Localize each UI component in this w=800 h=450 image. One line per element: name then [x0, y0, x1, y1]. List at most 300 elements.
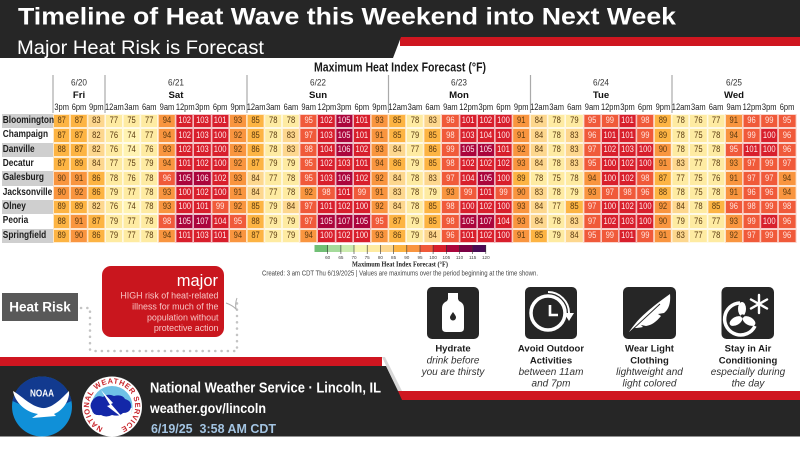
row: Peoria: Peoria: [3, 215, 28, 226]
hour labels: 9am: [726, 101, 741, 112]
row: Springfield: 99: [641, 230, 649, 241]
hour labels: 12pm: [459, 101, 478, 112]
row: Danville: 93: [375, 144, 384, 155]
row: Jacksonville: [2, 186, 796, 200]
row: Champaign: 101: [621, 130, 634, 141]
day headers: 6/23: [451, 78, 467, 88]
icon: feather: [623, 287, 676, 339]
row: Springfield: 86: [393, 230, 401, 241]
row: Bloomington: 95: [304, 115, 313, 126]
row: Decatur: 95: [304, 158, 313, 169]
row: Champaign: 100: [214, 130, 226, 141]
row: Champaign: 92: [234, 130, 242, 141]
hour labels: 3pm: [337, 101, 351, 112]
legend: heat index colour scale: 60: [325, 255, 331, 260]
row: Springfield: 92: [730, 230, 738, 241]
row: Springfield: 83: [676, 230, 685, 241]
row: Decatur: 93: [730, 158, 738, 169]
row: Peoria: [3, 214, 796, 229]
row: Springfield: 95: [588, 230, 596, 241]
icon: clock: [525, 287, 577, 339]
row: Danville: 100: [639, 144, 652, 155]
row: Danville: 84: [393, 144, 401, 155]
row: Olney: 100: [639, 201, 652, 212]
row: Bloomington: 77: [145, 115, 154, 126]
hour labels: 3am: [691, 101, 706, 112]
logo: NOAA: NOAA: [30, 388, 54, 400]
tip: stay in air conditioning: [711, 344, 786, 390]
icon: hydrate bottle: [427, 287, 479, 339]
row: Champaign: 102: [178, 130, 191, 141]
row: Bloomington: 95: [588, 115, 596, 126]
row: Galesburg: 84: [251, 173, 260, 184]
row: Peoria: 103: [621, 216, 634, 227]
row: Jacksonville: 93: [588, 187, 596, 198]
row: Galesburg: 76: [127, 173, 136, 184]
legend: heat index colour scale: 85: [391, 255, 397, 260]
row: Galesburg: 77: [676, 173, 685, 184]
row: Decatur: 100: [603, 158, 616, 169]
hour labels: 3pm: [195, 101, 210, 112]
row: Springfield: 97: [747, 230, 756, 241]
row: Danville: 95: [730, 144, 738, 155]
row: Galesburg: 78: [287, 173, 295, 184]
row: Galesburg: 94: [588, 173, 596, 184]
row: Champaign: 96: [588, 130, 596, 141]
row: Springfield: 100: [497, 230, 510, 241]
row: Danville: Danville: [3, 144, 35, 154]
row: Champaign: 87: [75, 130, 83, 141]
row: Champaign: 101: [603, 130, 616, 141]
row: Olney: 98: [783, 201, 791, 212]
row: Olney: 100: [462, 201, 474, 212]
row: Bloomington: 78: [552, 115, 561, 126]
hour labels: 3am: [266, 101, 281, 112]
row: Jacksonville: 83: [393, 187, 401, 198]
row: Peoria: 90: [659, 216, 667, 227]
hour labels: 6am: [709, 101, 723, 112]
row: Danville: 78: [552, 144, 561, 155]
row: Jacksonville: 78: [145, 187, 154, 198]
row: Springfield: 79: [287, 230, 295, 241]
row: Bloomington: [2, 114, 796, 128]
row: Danville: 82: [92, 144, 101, 155]
row: Bloomington: 79: [570, 115, 579, 126]
day headers: 6/25: [726, 78, 742, 88]
row: Galesburg: 103: [320, 173, 333, 184]
row: Peoria: 99: [747, 216, 756, 227]
row: Peoria: 87: [393, 216, 401, 227]
row: Decatur: 87: [57, 158, 66, 169]
row: Decatur: 92: [234, 158, 242, 169]
row: Springfield: 94: [163, 230, 171, 241]
row: Danville: 105: [462, 144, 474, 155]
row: Peoria: 105: [355, 216, 368, 227]
row: Peoria: 79: [676, 216, 685, 227]
row: Springfield: 78: [145, 230, 154, 241]
row: Galesburg: 94: [783, 173, 791, 184]
row: Olney: 97: [588, 201, 596, 212]
row: Bloomington: 89: [659, 115, 667, 126]
row: Bloomington: 78: [269, 115, 277, 126]
row: Springfield: 103: [196, 230, 209, 241]
legend: heat index colour scale: 75: [365, 255, 370, 260]
row: Decatur: 94: [163, 158, 171, 169]
row: Galesburg: 104: [462, 173, 474, 184]
row: Jacksonville: 98: [322, 187, 331, 198]
row: Decatur: 86: [393, 158, 401, 169]
row: Bloomington: 100: [497, 115, 510, 126]
row: Peoria: 107: [338, 216, 350, 227]
row: Olney: 93: [517, 201, 525, 212]
row: Bloomington: 96: [446, 115, 455, 126]
row: Peoria: 83: [570, 216, 579, 227]
row: Decatur: 102: [479, 158, 492, 169]
row: Peoria: 95: [375, 216, 384, 227]
row: Jacksonville: 79: [428, 187, 437, 198]
row: Olney: 100: [497, 201, 510, 212]
row: Champaign: 97: [304, 130, 313, 141]
row: Olney: 102: [338, 201, 350, 212]
major risk callout: protective action: [154, 323, 219, 333]
row: Decatur: 75: [127, 158, 136, 169]
row: Galesburg: 75: [694, 173, 703, 184]
row: Bloomington: 99: [606, 115, 614, 126]
row: Peoria: 79: [269, 216, 277, 227]
row: Springfield: 77: [127, 230, 136, 241]
row: Champaign: 83: [287, 130, 295, 141]
row: Jacksonville: 78: [287, 187, 295, 198]
row: Bloomington: 91: [517, 115, 525, 126]
row: Olney: 85: [428, 201, 437, 212]
row: Bloomington: 78: [411, 115, 419, 126]
row: Jacksonville: 91: [730, 187, 738, 198]
row: Bloomington: 101: [462, 115, 474, 126]
row: Springfield: 99: [606, 230, 614, 241]
day headers: Sun: [309, 90, 327, 101]
hour labels: 6am: [425, 101, 440, 112]
row: Olney: 77: [552, 201, 561, 212]
row: Peoria: 107: [479, 216, 492, 227]
row: Danville: 83: [287, 144, 295, 155]
hour labels: 6pm: [213, 101, 227, 112]
row: Decatur: 98: [446, 158, 455, 169]
row: Galesburg: 87: [659, 173, 667, 184]
hour labels: 9am: [585, 101, 599, 112]
legend: heat index colour scale: 100: [429, 255, 437, 260]
row: Springfield: Springfield: [3, 230, 46, 241]
major risk callout: illness for much of the: [132, 302, 219, 312]
row: Olney: 102: [479, 201, 492, 212]
row: Galesburg: 86: [92, 173, 101, 184]
row: Champaign: 78: [269, 130, 277, 141]
row: Springfield: 89: [57, 230, 66, 241]
row: Peoria: 98: [163, 216, 171, 227]
row: Olney: 79: [269, 201, 277, 212]
row: Champaign: 98: [446, 130, 455, 141]
hour labels: 12pm: [601, 101, 620, 112]
row: Springfield: 84: [570, 230, 579, 241]
tip: stay in air conditioning: Conditioning: [719, 356, 777, 366]
row: Peoria: 79: [110, 216, 118, 227]
tip: hydrate: [421, 344, 485, 378]
row: Peoria: 93: [517, 216, 525, 227]
row: Springfield: 86: [92, 230, 101, 241]
tip: stay in air conditioning: especially during: [711, 367, 786, 378]
row: Jacksonville: 78: [411, 187, 419, 198]
row: Peoria: 93: [730, 216, 738, 227]
hour labels: 9pm: [231, 101, 245, 112]
tip: avoid outdoor activities: between 11am: [519, 367, 583, 378]
row: Champaign: 103: [196, 130, 209, 141]
hour labels: 9am: [160, 101, 174, 112]
tip: wear light clothing: Clothing: [630, 356, 669, 366]
row: Jacksonville: 92: [304, 187, 313, 198]
hour labels: 12am: [247, 101, 265, 112]
row: Olney: 78: [411, 201, 419, 212]
row: Decatur: 100: [214, 158, 226, 169]
row: Decatur: 102: [320, 158, 333, 169]
row: Jacksonville: 79: [110, 187, 118, 198]
row: Galesburg: 102: [214, 173, 226, 184]
logo: National Weather Service: NATIONAL WEATHER SERVICE: [84, 378, 140, 432]
row: Peoria: 104: [214, 216, 226, 227]
row: Galesburg: 91: [75, 173, 83, 184]
hour labels: 3am: [549, 101, 564, 112]
row: Peoria: 100: [639, 216, 652, 227]
row: Springfield: 90: [75, 230, 83, 241]
row: Jacksonville: 93: [446, 187, 455, 198]
row: Danville: [2, 143, 796, 157]
row: Peoria: 104: [497, 216, 510, 227]
hour labels: 12am: [672, 101, 691, 112]
row: Decatur: 102: [621, 158, 634, 169]
row: Danville: 102: [178, 144, 191, 155]
row: Decatur: 100: [639, 158, 652, 169]
row: Olney: 85: [712, 201, 720, 212]
hour labels: 12pm: [176, 101, 195, 112]
row: Champaign: 78: [676, 130, 685, 141]
row: Champaign: 84: [535, 130, 543, 141]
row: Springfield: 100: [355, 230, 368, 241]
tip: wear light clothing: Wear Light: [625, 344, 675, 354]
row: Galesburg: 102: [355, 173, 368, 184]
hour labels: 9pm: [372, 101, 387, 112]
row: Danville: 78: [712, 144, 720, 155]
row: Champaign: 100: [763, 130, 776, 141]
row: Jacksonville: 91: [375, 187, 384, 198]
row: Olney: 101: [196, 201, 209, 212]
row: Decatur: 77: [694, 158, 703, 169]
legend: heat index colour scale: 65: [338, 255, 344, 260]
row: Champaign: 76: [110, 130, 118, 141]
row: Galesburg: 95: [304, 173, 313, 184]
row: Springfield: 94: [304, 230, 313, 241]
day headers: 6/22: [310, 78, 326, 88]
row: Danville: 90: [659, 144, 667, 155]
day headers: 6/21: [168, 78, 184, 88]
row: Bloomington: 95: [783, 115, 791, 126]
row: Danville: 76: [145, 144, 154, 155]
row: Jacksonville: 88: [659, 187, 667, 198]
legend: heat index colour scale: Maximum Heat Index Forecast (°F): [352, 260, 449, 268]
row: Danville: 102: [603, 144, 616, 155]
row: Springfield: 79: [552, 230, 561, 241]
heat risk label: [2, 293, 78, 321]
row: Danville: 83: [570, 144, 579, 155]
row: Jacksonville: 78: [712, 187, 720, 198]
row: Springfield: 94: [234, 230, 242, 241]
row: Olney: 78: [694, 201, 703, 212]
row: Jacksonville: 93: [163, 187, 171, 198]
row: Champaign: 101: [355, 130, 368, 141]
row: Olney: 98: [446, 201, 455, 212]
row: Danville: 92: [234, 144, 242, 155]
row: Jacksonville: 91: [234, 187, 242, 198]
row: Olney: 76: [110, 201, 118, 212]
row: Peoria: 98: [446, 216, 455, 227]
hour labels: 3am: [408, 101, 422, 112]
day headers: Fri: [73, 90, 85, 101]
row: Bloomington: 99: [765, 115, 773, 126]
major risk callout: major: [177, 272, 218, 290]
row: Galesburg: 100: [603, 173, 616, 184]
row: Jacksonville: 101: [479, 187, 492, 198]
row: Decatur: 87: [251, 158, 260, 169]
row: Peoria: 76: [694, 216, 703, 227]
day headers: Wed: [724, 90, 744, 101]
row: Galesburg: 102: [621, 173, 634, 184]
legend: heat index colour scale: 115: [469, 255, 477, 260]
row: Danville: 104: [320, 144, 333, 155]
heat risk label: Heat Risk: [9, 300, 71, 314]
row: Decatur: 95: [588, 158, 596, 169]
row: Galesburg: 97: [765, 173, 773, 184]
row: Olney: 84: [393, 201, 401, 212]
row: Olney: Olney: [3, 201, 26, 212]
row: Bloomington: 102: [479, 115, 492, 126]
row: Galesburg: 83: [428, 173, 437, 184]
row: Olney: 85: [570, 201, 579, 212]
row: Danville: 102: [355, 144, 368, 155]
row: Bloomington: 98: [641, 115, 649, 126]
hour labels: 9am: [443, 101, 458, 112]
title: Timeline of Heat Wave this Weekend into Next Week: [18, 4, 677, 30]
row: Jacksonville: 101: [338, 187, 350, 198]
row: Danville: 86: [251, 144, 260, 155]
row: Jacksonville: 94: [783, 187, 791, 198]
row: Galesburg: 105: [479, 173, 492, 184]
row: Bloomington: 101: [355, 115, 368, 126]
row: Jacksonville: 78: [552, 187, 561, 198]
row: Bloomington: 78: [287, 115, 295, 126]
row: Peoria: 97: [304, 216, 313, 227]
row: Jacksonville: 90: [517, 187, 525, 198]
row: Olney: 97: [304, 201, 313, 212]
row: Springfield: 101: [462, 230, 474, 241]
header band: [0, 0, 800, 58]
row: Springfield: 101: [178, 230, 191, 241]
row: Danville: 88: [57, 144, 66, 155]
row: Champaign: Champaign: [3, 129, 48, 140]
row: Galesburg: 106: [196, 173, 209, 184]
row: Springfield: 91: [659, 230, 667, 241]
row: Peoria: 96: [783, 216, 791, 227]
row: Springfield: 96: [446, 230, 455, 241]
row: Bloomington: 75: [127, 115, 136, 126]
row: Decatur: 78: [712, 158, 720, 169]
legend: heat index colour scale: 105: [442, 255, 451, 260]
hour labels: 6pm: [355, 101, 369, 112]
row: Peoria: 102: [603, 216, 616, 227]
row: Galesburg: 89: [517, 173, 525, 184]
row: Jacksonville: 96: [765, 187, 773, 198]
row: Galesburg: 78: [145, 173, 154, 184]
row: Olney: 89: [57, 201, 66, 212]
row: Decatur: 103: [338, 158, 350, 169]
hour labels: 12pm: [318, 101, 336, 112]
row: Springfield: 102: [479, 230, 492, 241]
tip: hydrate: you are thirsty: [421, 367, 485, 378]
day headers: 6/20: [71, 78, 87, 88]
row: Champaign: 87: [57, 130, 66, 141]
row: Champaign: 83: [570, 130, 579, 141]
row: Bloomington: 96: [747, 115, 756, 126]
hour labels: 3pm: [620, 101, 635, 112]
chart title: Maximum Heat Index Forecast (°F): [314, 60, 486, 74]
row: Danville: 106: [338, 144, 350, 155]
hour labels: 6am: [567, 101, 582, 112]
row: Danville: 74: [127, 144, 136, 155]
hour labels: 3pm: [54, 101, 69, 112]
day headers: Tue: [593, 90, 609, 101]
row: Olney: 89: [75, 201, 83, 212]
row: Galesburg: 78: [110, 173, 118, 184]
row: Champaign: 99: [747, 130, 756, 141]
row: Jacksonville: 99: [358, 187, 366, 198]
row: Bloomington: 83: [92, 115, 101, 126]
row: Springfield: 79: [269, 230, 277, 241]
row: Decatur: 84: [535, 158, 543, 169]
row: Bloomington: 77: [712, 115, 720, 126]
hour labels: 6am: [284, 101, 298, 112]
row: Danville: 78: [676, 144, 685, 155]
row: Bloomington: 101: [214, 115, 226, 126]
tip: avoid outdoor activities: Avoid Outdoor: [518, 344, 584, 354]
row: Galesburg: 97: [747, 173, 756, 184]
row: Champaign: 103: [462, 130, 474, 141]
row: Bloomington: 93: [375, 115, 384, 126]
row: Danville: 100: [214, 144, 226, 155]
row: Danville: 96: [783, 144, 791, 155]
row: Olney: 85: [251, 201, 260, 212]
row: Danville: 103: [196, 144, 209, 155]
row: Danville: 101: [745, 144, 758, 155]
row: Jacksonville: 75: [694, 187, 703, 198]
row: Decatur: 79: [269, 158, 277, 169]
row: Jacksonville: 79: [570, 187, 579, 198]
row: Peoria: 97: [588, 216, 596, 227]
row: Bloomington: 87: [57, 115, 66, 126]
row: Champaign: [3, 128, 796, 143]
row: Springfield: 93: [375, 230, 384, 241]
row: Olney: 92: [234, 201, 242, 212]
row: Olney: [2, 200, 796, 214]
footer office name: National Weather Service · Lincoln, IL: [150, 380, 381, 396]
row: Jacksonville: 77: [127, 187, 136, 198]
row: Olney: 74: [127, 201, 136, 212]
hour labels: 12am: [105, 101, 124, 112]
